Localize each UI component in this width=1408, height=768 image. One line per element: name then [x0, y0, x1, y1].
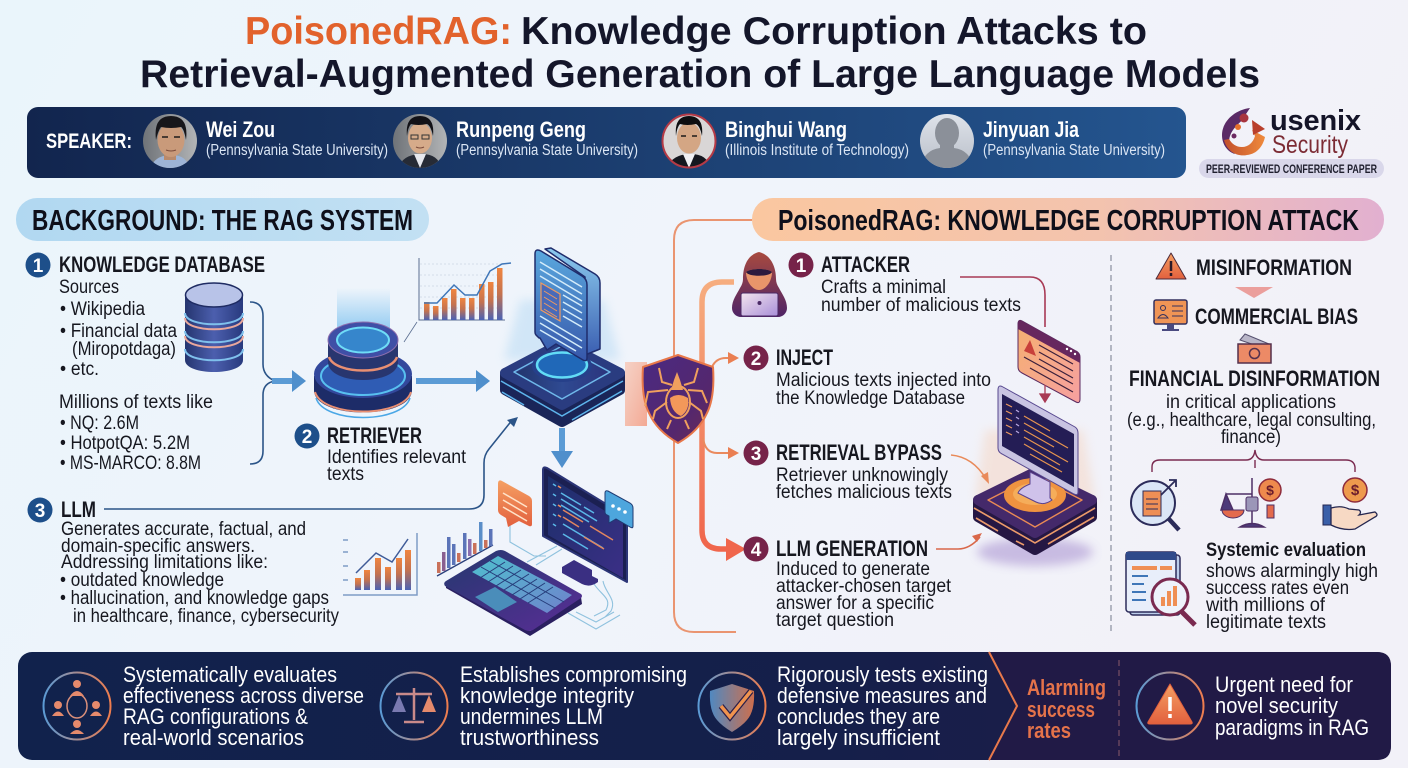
- financial disinformation text: finance): [1221, 427, 1281, 448]
- step 2: retriever text: texts: [327, 464, 364, 485]
- arrow into monitor: [1040, 385, 1050, 402]
- finding 2: Establishes compromising: [460, 662, 687, 687]
- step 1: knowledge database text: • HotpotQA: 5.2M: [60, 433, 190, 454]
- step 2: retriever text: Identifies relevant: [327, 447, 467, 468]
- step 1: knowledge database text: • Financial data: [60, 321, 177, 342]
- step 1: knowledge database text: Sources: [59, 277, 119, 298]
- step 1: knowledge database text: KNOWLEDGE DATABASE: [59, 252, 265, 277]
- divider: [1110, 255, 1112, 632]
- step 1: knowledge database text: Millions of texts like: [59, 392, 213, 413]
- step 2: retriever text: [294, 423, 467, 485]
- step 4: LLM generation text: attacker-chosen target: [776, 576, 952, 597]
- financial disinformation text: in critical applications: [1166, 392, 1336, 413]
- icon: bug shield: [643, 355, 713, 443]
- step 1: knowledge database text: 1: [33, 256, 44, 277]
- speaker: Wei Zou: Wei Zou: [206, 117, 275, 142]
- step 4: LLM generation text: Induced to generate: [776, 559, 930, 580]
- step 4: LLM generation text: target question: [776, 610, 894, 631]
- finding 1: real-world scenarios: [123, 725, 304, 750]
- finding 1: RAG configurations &: [123, 704, 308, 729]
- finding 4: Urgent need for: [1215, 672, 1353, 697]
- step 4: LLM generation text: LLM GENERATION: [776, 536, 928, 561]
- arrow: generation to server: [936, 533, 982, 549]
- speaker: Binghui Wang: (Illinois Institute of Technology): [725, 142, 909, 159]
- misinformation label: MISINFORMATION: [1196, 255, 1352, 280]
- icon: retriever disks: [314, 288, 412, 418]
- systemic evaluation text: Systemic evaluation: [1206, 540, 1366, 561]
- step 4: LLM generation text: answer for a specific: [776, 593, 934, 614]
- step 3: LLM text: Generates accurate, factual, and: [61, 519, 306, 540]
- step 2: inject text: 2: [751, 349, 761, 370]
- finding 4: novel security: [1215, 693, 1338, 718]
- step 2: retriever text: RETRIEVER: [327, 423, 422, 448]
- finding 3: largely insufficient: [777, 725, 940, 750]
- speaker: Jinyuan Jia: Jinyuan Jia: [983, 117, 1080, 142]
- chat bubble orange: [498, 480, 532, 527]
- alarming success rates: Alarming: [1027, 675, 1106, 700]
- speaker: Binghui Wang: Binghui Wang: [725, 117, 847, 142]
- step 1: attacker text: number of malicious texts: [821, 295, 1021, 316]
- iso bars: [437, 522, 493, 576]
- chat bubble blue: [605, 491, 633, 528]
- title: Knowledge Corruption Attacks to: [521, 10, 1147, 53]
- arrow: retriever to server and bracket: [250, 302, 490, 464]
- step 3: LLM text: [28, 497, 339, 627]
- step 3: retrieval bypass text: 3: [751, 444, 761, 465]
- finding 3: concludes they are: [777, 704, 940, 729]
- alarming success rates: rates: [1027, 718, 1071, 743]
- icon: central server with documents: [501, 248, 623, 422]
- speaker bar: [27, 107, 1186, 178]
- panel: RAG system: [26, 248, 633, 636]
- finding 2: knowledge integrity: [460, 683, 634, 708]
- step 2: inject text: Malicious texts injected into: [776, 370, 991, 391]
- step 3: LLM text: Addressing limitations like:: [61, 552, 268, 573]
- speaker: Runpeng Geng: Runpeng Geng: [456, 117, 586, 142]
- speaker: Jinyuan Jia: (Pennsylvania State University): [983, 142, 1165, 159]
- step 3: LLM text: domain-specific answers.: [61, 536, 255, 557]
- usenix security logo: usenix: [1270, 105, 1361, 137]
- icon: coin in hand: [1323, 478, 1377, 530]
- icon: laptop and monitor: [437, 467, 633, 636]
- finding 4: [1136, 672, 1369, 740]
- usenix security logo: Security: [1272, 131, 1348, 159]
- step 3: LLM text: • hallucination, and knowledge gaps: [60, 588, 329, 609]
- icon: warning triangle: [1156, 253, 1186, 279]
- financial disinformation text: (e.g., healthcare, legal consulting,: [1127, 410, 1376, 431]
- panel: attack flow: [625, 220, 1095, 632]
- step 1: knowledge database text: • MS-MARCO: 8.8M: [60, 453, 201, 474]
- finding 4: paradigms in RAG: [1215, 715, 1369, 740]
- icon: money: [1238, 334, 1271, 363]
- icon: network of people: [44, 672, 110, 740]
- icon: warning: [1136, 672, 1204, 740]
- chart: LLM bars: [343, 533, 417, 595]
- heading: background: [16, 198, 429, 241]
- glow band between server and shield: [625, 362, 647, 426]
- thick attack flow arrows: [702, 282, 746, 561]
- icon: scale and coin: $: [1266, 482, 1274, 498]
- step 1: attacker text: [788, 252, 1021, 316]
- icon: shield check: [698, 672, 766, 740]
- heading: PoisonedRAG attack: [752, 198, 1384, 241]
- step 2: retriever text: 2: [302, 427, 312, 448]
- footer bar: [18, 652, 1391, 760]
- finding 1: Systematically evaluates: [123, 662, 337, 687]
- systemic evaluation text: legitimate texts: [1206, 612, 1326, 633]
- usenix security logo: [1199, 105, 1384, 178]
- arrow: retrieval bypass to server: [951, 455, 989, 484]
- finding 2: trustworthiness: [460, 725, 599, 750]
- speaker: Runpeng Geng: [393, 114, 638, 170]
- outer bracket line: [674, 220, 752, 632]
- laptop: [444, 550, 582, 636]
- icon: report with magnifier: [1126, 552, 1195, 625]
- step 1: attacker text: Crafts a minimal: [821, 277, 946, 298]
- step 1: attacker text: 1: [796, 256, 807, 277]
- finding 3: defensive measures and: [777, 683, 987, 708]
- monitor: [543, 467, 627, 586]
- systemic evaluation text: [1205, 540, 1378, 633]
- finding 1: [44, 662, 364, 750]
- speaker: Wei Zou: [143, 114, 388, 170]
- step 1: attacker text: ATTACKER: [821, 252, 910, 277]
- step 1: knowledge database text: • NQ: 2.6M: [60, 413, 139, 434]
- speaker: Binghui Wang: [662, 114, 909, 170]
- monitor: [998, 386, 1078, 495]
- icon: coin in hand: $: [1351, 482, 1360, 499]
- chevron outline: [989, 652, 1017, 760]
- icon: scale: [380, 672, 448, 740]
- step 3: LLM text: 3: [35, 501, 45, 522]
- speaker label: SPEAKER:: [46, 130, 132, 153]
- chart: retrieval bars: [404, 258, 511, 342]
- bracket: [1152, 450, 1355, 472]
- title: PoisonedRAG:: [245, 10, 512, 53]
- commercial bias label: COMMERCIAL BIAS: [1195, 304, 1358, 329]
- step 4: LLM generation text: [744, 536, 952, 631]
- speaker: Jinyuan Jia: [920, 114, 1165, 170]
- systemic evaluation text: success rates even: [1206, 578, 1349, 599]
- icon: commercial bias monitor: [1154, 300, 1187, 331]
- title: Retrieval-Augmented Generation of Large Language Models: [140, 53, 1260, 96]
- step 1: knowledge database text: • Wikipedia: [60, 299, 145, 320]
- illustration: compromised server: [974, 320, 1095, 566]
- finding 3: [698, 662, 988, 750]
- step 2: inject text: [744, 345, 991, 409]
- footer divider: [1118, 660, 1120, 756]
- step 3: LLM text: LLM: [61, 497, 96, 522]
- step 2: inject text: the Knowledge Database: [776, 388, 965, 409]
- arrow: LLM to server: [104, 417, 518, 509]
- step 1: knowledge database text: [26, 252, 265, 474]
- finding 2: undermines LLM: [460, 704, 603, 729]
- icon: scale and coin: [1221, 478, 1281, 527]
- alarming success rates: [1027, 675, 1106, 743]
- alarming success rates: success: [1027, 697, 1095, 722]
- icon: magnifier document: [1131, 480, 1179, 530]
- heading: background: BACKGROUND: THE RAG SYSTEM: [32, 205, 413, 237]
- step 1: knowledge database text: (Miropotdaga): [72, 339, 176, 360]
- financial disinformation text: [1127, 366, 1380, 448]
- step 1: knowledge database text: • etc.: [60, 359, 99, 380]
- systemic evaluation text: shows alarmingly high: [1206, 561, 1378, 582]
- down arrow: [1235, 287, 1273, 298]
- finding 2: [380, 662, 687, 750]
- speaker: Runpeng Geng: (Pennsylvania State University): [456, 142, 638, 159]
- step 3: LLM text: • outdated knowledge: [60, 570, 224, 591]
- warning window: [1018, 320, 1080, 403]
- speaker: Wei Zou: (Pennsylvania State University): [206, 142, 388, 159]
- step 4: LLM generation text: 4: [751, 540, 762, 561]
- step 2: inject text: INJECT: [776, 345, 833, 370]
- step 3: retrieval bypass text: RETRIEVAL BYPASS: [776, 440, 942, 465]
- peer-reviewed pill: [1199, 159, 1384, 178]
- icon: hooded attacker: [732, 252, 787, 317]
- systemic evaluation text: with millions of: [1205, 595, 1326, 616]
- logo swirl: [1222, 108, 1265, 155]
- step 3: retrieval bypass text: Retriever unknowingly: [776, 465, 948, 486]
- step 3: LLM text: in healthcare, finance, cybersecurity: [73, 606, 339, 627]
- title: [140, 10, 1260, 96]
- panel: impact column: [1111, 253, 1380, 633]
- step 3: retrieval bypass text: fetches malicious texts: [776, 482, 952, 503]
- finding 1: effectiveness across diverse: [123, 683, 364, 708]
- icon: database: [185, 283, 243, 372]
- footer chevron: [989, 652, 1391, 760]
- step 3: retrieval bypass text: [744, 440, 952, 503]
- arrow: attacker to window: [960, 277, 1045, 327]
- finding 3: Rigorously tests existing: [777, 662, 988, 687]
- arrow: server to LLM: [551, 428, 573, 468]
